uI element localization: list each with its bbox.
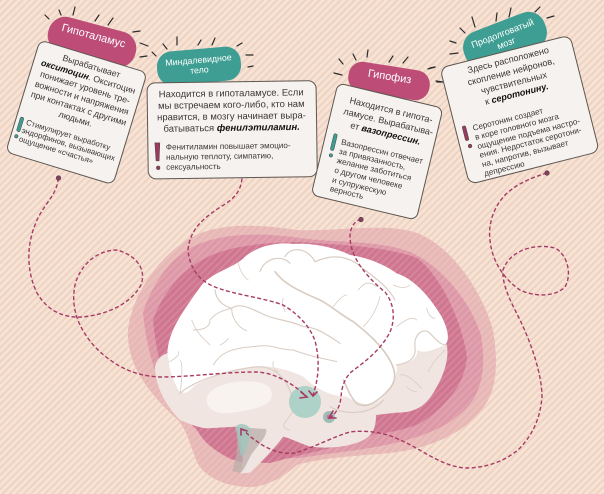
card	[6, 40, 147, 185]
card: окситоцин. Окситоцин	[40, 58, 137, 96]
pituitary teal region	[323, 411, 335, 423]
card: при контактах с другими	[30, 89, 128, 128]
label pill: Миндалевидное	[165, 52, 232, 68]
medulla teal region	[235, 424, 250, 457]
ticks	[334, 50, 443, 82]
ticks	[430, 7, 554, 82]
brain	[155, 243, 448, 473]
card: Серотонин создает	[472, 106, 544, 133]
card: депрессию	[483, 159, 525, 178]
card: Стимулирует выработку	[25, 118, 112, 152]
card: верность	[329, 184, 364, 201]
ticks	[152, 37, 253, 67]
note icon	[155, 143, 160, 170]
card	[440, 35, 599, 184]
card: в коре головного мозга	[474, 112, 560, 142]
label pill: Гипофиз	[367, 68, 412, 86]
hemisphere	[167, 243, 448, 404]
card	[147, 81, 317, 179]
card: и супружескую	[331, 175, 387, 197]
card: Находится в гипоталамусе. Если	[159, 87, 304, 100]
card: на, напротив, вызывает	[481, 138, 570, 169]
card: понижает уровень тре-	[39, 69, 131, 106]
arrowheads	[241, 391, 336, 435]
panel: Гипофиз	[311, 50, 443, 220]
card: к серотонину.	[484, 81, 549, 107]
card: за привязанность,	[338, 147, 407, 171]
card: ощущение «счастья»	[18, 134, 95, 166]
amygdala teal region	[289, 386, 321, 418]
card: чувствительных	[480, 70, 548, 96]
card: нальную теплоту, симпатию,	[166, 151, 273, 162]
card: о другом человеке	[334, 166, 404, 191]
sulci	[170, 250, 447, 430]
label pill: Гипоталамус	[60, 22, 127, 51]
ticks	[45, 7, 148, 57]
card: вожности и напряжения	[34, 79, 130, 117]
card: Вазопрессин отвечает	[340, 138, 424, 166]
brainstem grey region	[232, 427, 266, 473]
right lobe shading	[400, 345, 445, 365]
label pill	[156, 45, 242, 87]
cerebellum light area	[207, 381, 272, 413]
card: Вырабатывает	[61, 53, 122, 80]
panel: Продолговатый мозг	[430, 7, 599, 184]
label pill: Продолговатый	[470, 17, 535, 50]
line end dots	[56, 170, 549, 222]
card: мы встречаем кого-либо, кто нам	[158, 99, 305, 112]
note icon	[462, 125, 472, 148]
card: Фенитиламин повышает эмоцио-	[166, 141, 291, 152]
label pill	[346, 60, 432, 102]
card: людьми.	[57, 109, 94, 129]
card: эндорфинов, вызывающих	[21, 126, 116, 163]
card: ет вазопрессин.	[349, 120, 422, 147]
card: Находится в гипота-	[349, 95, 434, 125]
label pill	[458, 7, 552, 73]
card	[311, 83, 443, 220]
panel: Гипоталамус	[6, 7, 148, 185]
card: ощущение подъема настро-	[476, 116, 581, 151]
note icon	[14, 117, 24, 138]
card: желание заботиться	[336, 156, 412, 183]
card: сексуальность	[166, 162, 221, 172]
brain base: stem and cerebellum	[155, 330, 447, 473]
panel: Миндалевидное тело	[147, 37, 317, 179]
label pill	[44, 13, 140, 71]
card: Здесь расположено	[466, 45, 550, 75]
label pill: тело	[190, 64, 209, 76]
card: батываться фенилэтиламин.	[163, 122, 300, 135]
card: скопление нейронов,	[467, 56, 556, 87]
card: ения. Недостаток серотони-	[479, 125, 583, 160]
label pill: мозг	[496, 35, 517, 51]
note icon	[329, 133, 338, 157]
card: нравится, в мозгу начинает выра-	[157, 110, 306, 123]
dashed connector lines	[29, 172, 568, 468]
card: ламусе. Вырабатыва-	[342, 106, 434, 137]
brain halo	[128, 226, 496, 487]
